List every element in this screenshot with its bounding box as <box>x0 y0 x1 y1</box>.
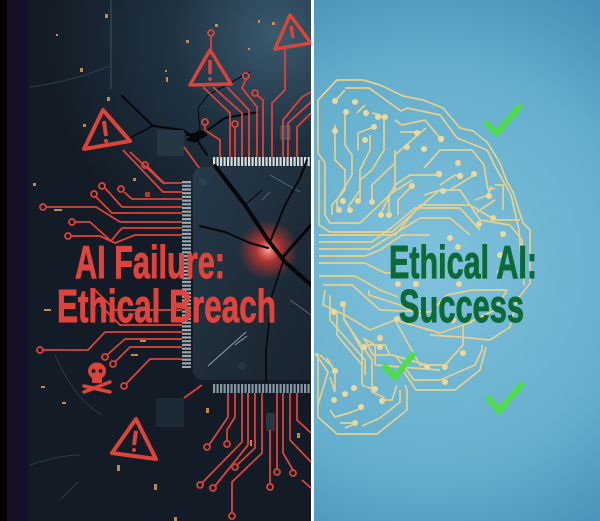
check mark: top right <box>485 105 521 133</box>
small chip: bottom <box>156 398 184 427</box>
cracks on the board <box>122 72 258 155</box>
divider <box>311 0 314 521</box>
small chip: right lower <box>266 413 275 431</box>
sparks <box>33 14 300 521</box>
icon: skull and crossbones <box>84 362 110 392</box>
chip pins: bottom <box>213 384 311 393</box>
warning triangle: bottom <box>112 419 156 459</box>
small chip: right upper <box>281 126 290 139</box>
faint scratches <box>30 0 111 500</box>
red circuit traces <box>37 30 311 519</box>
panel: ethical AI (blue right side) <box>311 0 600 521</box>
check mark: bottom right <box>487 383 523 411</box>
gold brain circuit <box>315 80 530 434</box>
check mark: lower brain <box>383 353 414 377</box>
chip fracture <box>200 160 311 382</box>
panel background <box>0 0 311 521</box>
heading: AI Failure: Ethical Breach: Ethical Breach <box>57 280 276 332</box>
heading: Ethical AI: Success: Success <box>399 280 524 332</box>
heading: AI Failure: Ethical Breach <box>58 244 274 323</box>
panel: AI failure (dark left side) <box>0 0 323 521</box>
chip pins: top <box>213 157 311 166</box>
chip pins: left <box>182 181 191 368</box>
small chip: top <box>157 130 184 156</box>
warning triangle: top center <box>190 50 231 85</box>
impact glow <box>238 220 298 280</box>
heading: AI Failure: Ethical Breach: AI Failure: <box>75 236 225 288</box>
warning triangle: left <box>84 110 130 149</box>
main processor chip <box>193 167 323 380</box>
gold solder pads <box>331 98 506 426</box>
warning triangle: top right <box>275 15 311 49</box>
heading: Ethical AI: Success <box>389 236 537 332</box>
left edge strip <box>0 0 28 521</box>
